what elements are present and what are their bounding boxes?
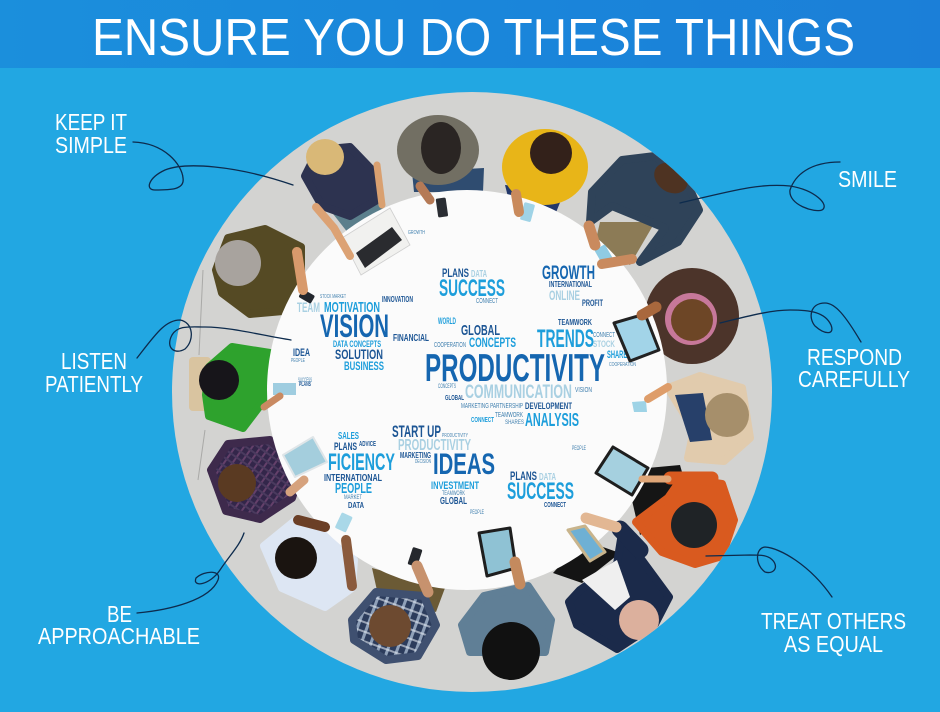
callout: keep it simple: SIMPLE [55, 132, 127, 158]
arm: plaid man [417, 566, 428, 592]
secondary words: SOLUTION [335, 346, 383, 362]
device: phone bottom [407, 547, 423, 567]
word: IDEAS: IDEAS [433, 448, 495, 481]
concrete floor circle [172, 92, 772, 692]
device: tablet right lower [596, 447, 648, 495]
callout: respond carefully: CAREFULLY [798, 366, 910, 392]
secondary words: CONCEPTS [469, 334, 516, 350]
secondary words: DATA [539, 472, 556, 483]
secondary words: GROWTH [408, 230, 425, 236]
word: GROWTH: GROWTH [542, 263, 595, 284]
arm: navy suit man [620, 529, 640, 550]
secondary words: DATA [348, 501, 364, 510]
secondary words: PEOPLE [335, 480, 372, 497]
callout: be approachable [38, 533, 244, 649]
person: blonde woman, navy shirt [305, 139, 385, 238]
secondary words: GLOBAL [461, 322, 500, 339]
word: FICIENCY: FICIENCY [328, 449, 395, 476]
secondary words [291, 230, 636, 516]
callout: be approachable: BE [107, 601, 132, 627]
callout: treat others as equal: AS EQUAL [784, 631, 883, 657]
secondary words: SALES [338, 431, 359, 442]
secondary words: CONNECT [544, 502, 566, 509]
secondary words: MOTIVATION [324, 299, 380, 316]
person: man in brown sweater [645, 268, 739, 364]
secondary words: VISION [575, 387, 592, 394]
arms and hands reaching onto the table [264, 165, 712, 592]
callout: smile [680, 162, 897, 211]
person: man in denim shirt [462, 586, 551, 680]
device: small tablet left [273, 383, 296, 395]
word: SUCCESS upper: SUCCESS [439, 275, 505, 302]
secondary words: ADVICE [359, 441, 376, 448]
device: phone in yellow top's hand [520, 202, 535, 222]
device: phone top [436, 197, 448, 218]
arm: purple plaid [290, 480, 304, 492]
person: man in orange shirt [625, 465, 734, 564]
arm: light blue shirt man [298, 520, 325, 527]
secondary words: CONNECT [476, 298, 498, 305]
round white table [267, 190, 667, 590]
person: woman in grey top [397, 115, 484, 192]
person: man in light blue shirt [264, 520, 354, 607]
person: woman in green top [189, 347, 270, 428]
callout: listen patiently: PATIENTLY [45, 371, 143, 397]
secondary words: CONNECT [593, 332, 615, 339]
secondary words: DECISION [415, 459, 431, 465]
secondary words: STOCK [593, 339, 615, 349]
secondary words: PRODUCTIVITY [442, 433, 468, 439]
secondary words: SHARES [607, 349, 631, 361]
arm: blonde woman [316, 207, 350, 256]
callout: keep it simple: KEEP IT [55, 109, 127, 135]
secondary words: PEOPLE [470, 510, 484, 516]
person: man in navy sweater [590, 156, 699, 265]
secondary words: TEAM [297, 299, 320, 315]
secondary words: PEOPLE [291, 358, 305, 364]
device: tan tablet [568, 526, 605, 561]
arm: yellow top [516, 194, 519, 212]
secondary words: PRODUCTIVITY [398, 437, 471, 454]
laptop [342, 208, 410, 275]
arm: blonde woman right [377, 165, 382, 205]
device: small tablet right [632, 401, 647, 412]
arm: denim man [515, 562, 520, 584]
word: COMMUNICATION: COMMUNICATION [465, 382, 572, 403]
secondary words: FINANCIAL [393, 333, 429, 344]
person: purple plaid shirt [211, 440, 301, 519]
header banner [0, 0, 940, 68]
secondary words: MARKETING [400, 451, 431, 460]
device: tablet left lower [283, 437, 327, 477]
secondary words: INTERNATIONAL [324, 473, 382, 484]
device: phone near navy sweater [594, 244, 614, 266]
callout: be approachable: APPROACHABLE [38, 623, 200, 649]
secondary words: DEVELOPMENT [525, 401, 572, 411]
device: tablet bottom [479, 528, 516, 576]
callout: respond carefully [720, 303, 910, 392]
person: older man in olive sweater [215, 229, 301, 314]
secondary words: INNOVATION [382, 295, 413, 304]
secondary words: PEOPLE [572, 446, 586, 452]
arm: brown sweater man [642, 307, 656, 315]
callout: treat others as equal [706, 547, 906, 657]
device: phone left [298, 289, 315, 304]
arm: green top [264, 396, 280, 407]
secondary words: BUSINESS [344, 359, 384, 373]
secondary words: PLANS [334, 441, 357, 453]
secondary words: WORLD [438, 316, 456, 326]
secondary words: CONNECT [471, 417, 494, 424]
person: woman in cream jacket [668, 376, 750, 461]
arm: cream jacket woman [648, 387, 668, 399]
secondary words: MARKETING PARTNERSHIP [461, 403, 523, 410]
device: pale tablet lower left [335, 512, 353, 533]
secondary words: PLANS [299, 382, 311, 388]
word: TRENDS: TRENDS [537, 325, 594, 353]
people seated around the table [189, 115, 750, 680]
callout: listen patiently: LISTEN [61, 348, 127, 374]
arm: grey top woman [420, 186, 430, 200]
secondary words: PROFIT [582, 298, 603, 308]
phones and tablets on the table [273, 197, 659, 576]
callout: smile: SMILE [838, 166, 897, 192]
secondary words: TEAMWORK [442, 491, 465, 497]
word: PRODUCTIVITY: PRODUCTIVITY [425, 347, 605, 390]
secondary words: MARKET [344, 495, 362, 501]
person: man in blue plaid shirt [352, 568, 445, 660]
arms: navy sweater man [589, 226, 595, 245]
secondary words: CONCEPTS [438, 384, 456, 390]
secondary words: COOPERATION [609, 362, 636, 368]
secondary words: COOPERATION [434, 342, 466, 349]
callout: respond carefully: RESPOND [807, 344, 902, 370]
word: SUCCESS lower: SUCCESS [507, 478, 574, 505]
word: VISION: VISION [320, 308, 389, 344]
secondary words: PLANS [442, 266, 469, 280]
secondary words: SHARES [505, 420, 524, 426]
person: bald man in navy suit [553, 533, 669, 649]
secondary words: INTERNATIONAL [549, 280, 592, 289]
callout: listen patiently [45, 320, 291, 397]
secondary words: GLOBAL [445, 395, 464, 402]
arm: orange shirt man [670, 472, 712, 484]
secondary words: TEAMWORK [495, 412, 523, 419]
secondary words: GLOBAL [440, 496, 467, 507]
secondary words: SUCCESS [298, 378, 312, 384]
secondary words: IDEA [293, 347, 310, 359]
person: yellow top [502, 129, 588, 215]
callout: treat others as equal: TREAT OTHERS [761, 608, 906, 634]
title: ENSURE YOU DO THESE THINGS [92, 9, 855, 67]
secondary words: ONLINE [549, 287, 580, 303]
device: tablet right upper [614, 314, 659, 361]
arm: olive sweater man [297, 252, 303, 290]
secondary words: INVESTMENT [431, 480, 479, 492]
callout: keep it simple [55, 109, 293, 190]
secondary words: START UP [392, 422, 441, 441]
world map word cloud [291, 230, 636, 516]
word: ANALYSIS: ANALYSIS [525, 410, 579, 430]
secondary words: TEAMWORK [558, 318, 592, 327]
secondary words: STOCK MARKET [320, 294, 346, 300]
secondary words: DATA [471, 269, 487, 280]
secondary words: DATA CONCEPTS [333, 339, 381, 349]
secondary words: PLANS [510, 469, 537, 483]
